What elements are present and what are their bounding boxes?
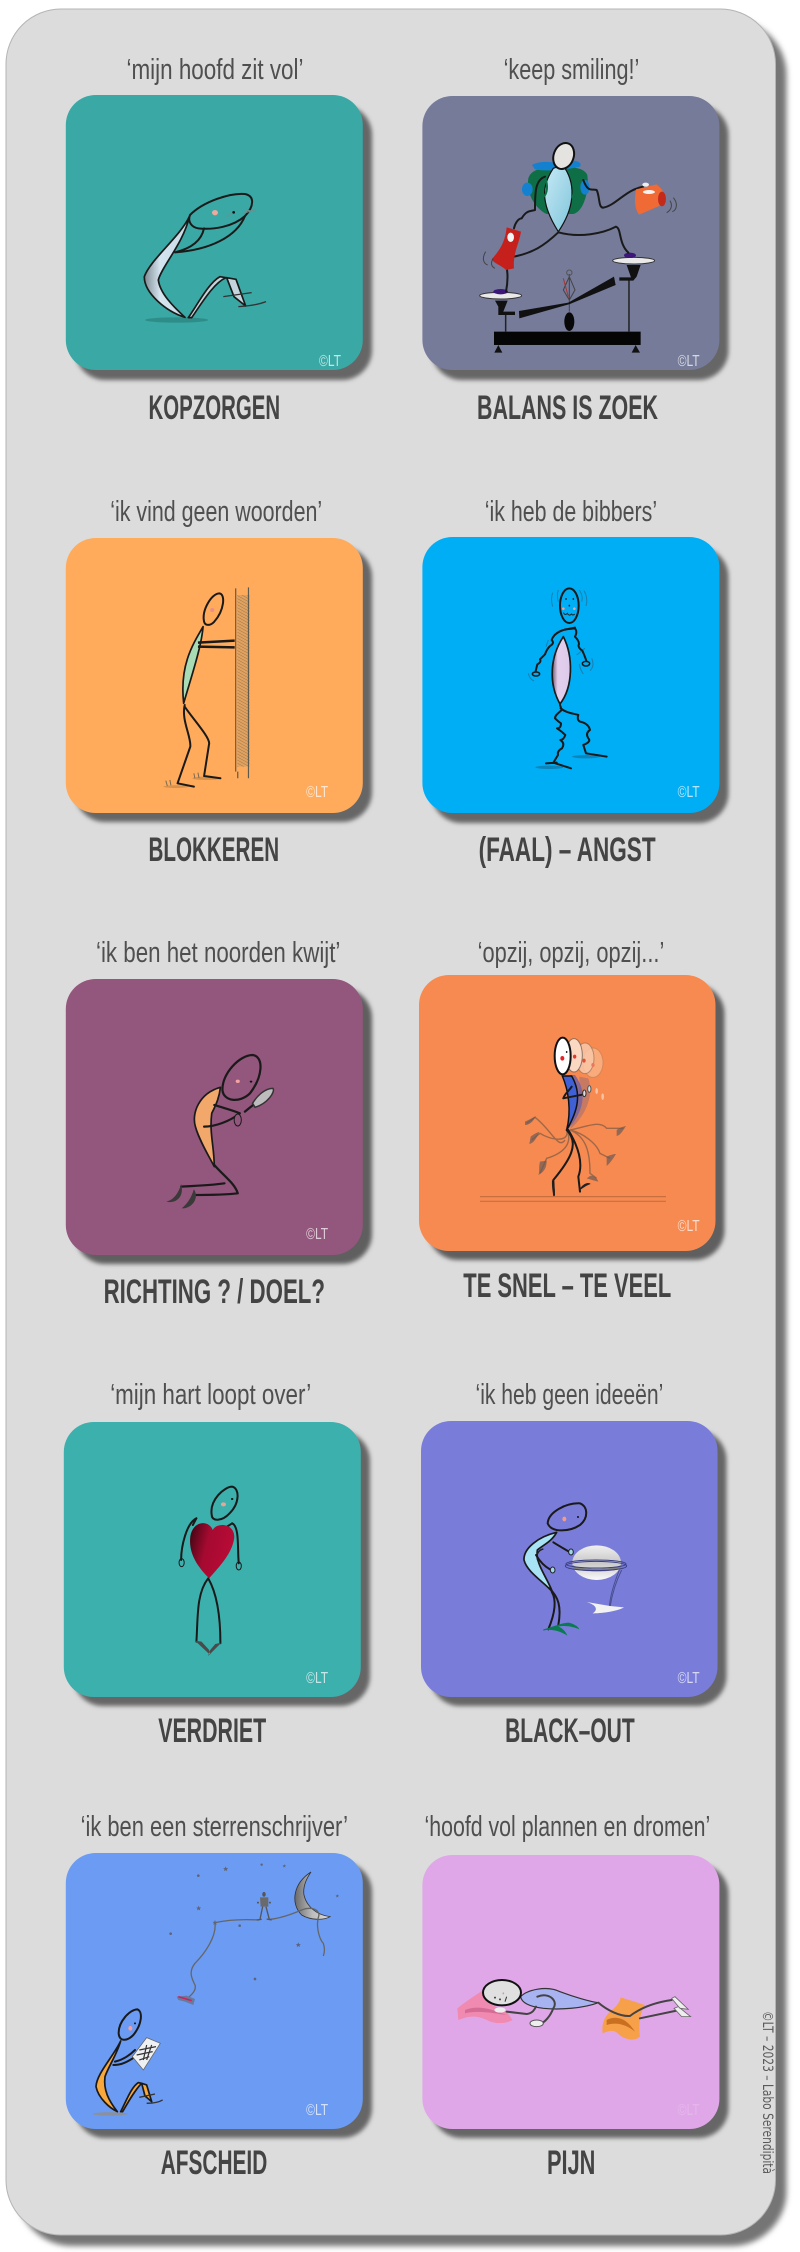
card background [422,537,728,823]
panel: BLOKKEREN [66,496,372,869]
illustration: figure pushing against a wall [163,587,249,788]
panel: KOPZORGEN [66,54,372,427]
card background [422,96,728,380]
copyright: ©LT [678,1670,700,1687]
title: TE SNEL – TE VEEL [463,1267,671,1305]
card background [419,975,724,1260]
panel: PIJN [422,1811,728,2182]
quote: ‘ik heb geen ideeën’ [476,1379,663,1411]
copyright: ©LT [306,1670,328,1687]
copyright: ©LT [306,2102,328,2119]
illustration: figure lying down with pink and orange cloths [457,1980,691,2040]
quote: ‘mijn hoofd zit vol’ [126,54,304,86]
copyright: ©LT [678,2102,700,2119]
card background [422,1855,728,2138]
illustration: figure balancing on a scale [480,140,676,353]
quote: ‘ik ben een sterrenschrijver’ [81,1811,348,1843]
title: KOPZORGEN [148,389,280,427]
card background [66,538,372,822]
illustration: seated figure with head in thought [144,194,266,323]
quote: ‘opzij, opzij, opzij...’ [478,937,664,969]
card background [66,1853,372,2138]
copyright: ©LT [678,1218,700,1235]
panel: AFSCHEID [66,1811,372,2182]
panel: TE SNEL – TE VEEL [419,937,724,1305]
illustration: figure rushing with motion trail [480,1038,666,1201]
card background [64,1422,370,1706]
title: VERDRIET [158,1712,266,1750]
panel: RICHTING ? / DOEL? [66,937,372,1311]
copyright: ©LT [678,784,700,801]
copyright: ©LT [678,353,700,370]
title: PIJN [547,2144,595,2182]
panel: BALANS IS ZOEK [422,54,728,427]
title: BLOKKEREN [148,831,279,869]
quote: ‘ik heb de bibbers’ [485,496,657,528]
illustration: shaking figure [528,588,607,769]
credit: vertical copyright line: ©LT – 2023 – Labo Serendipità [759,2011,775,2174]
panel: BLACK-OUT [421,1379,726,1750]
illustration: figure looking at a split sphere [524,1503,627,1636]
panel: (FAAL) – ANGST [422,496,728,869]
copyright: ©LT [306,784,328,801]
title: AFSCHEID [161,2144,267,2182]
quote: ‘mijn hart loopt over’ [110,1379,311,1411]
quote: ‘keep smiling!’ [504,54,639,86]
illustration: writer, stars, moon and tightrope walker [93,1863,339,2116]
quote: ‘ik ben het noorden kwijt’ [96,937,340,969]
card background [421,1421,726,1706]
title: BLACK–OUT [505,1712,635,1750]
card background [66,979,372,1264]
quote: ‘ik vind geen woorden’ [110,496,322,528]
title: (FAAL) – ANGST [479,831,656,869]
panel: VERDRIET [64,1379,370,1750]
title: BALANS IS ZOEK [477,389,658,427]
illustration: figure with a large red heart [179,1487,241,1656]
card background [66,95,372,380]
illustration: kneeling figure with magnifying glass [166,1055,273,1208]
title: RICHTING ? / DOEL? [104,1273,325,1311]
copyright: ©LT [319,353,341,370]
copyright: ©LT [306,1226,328,1243]
